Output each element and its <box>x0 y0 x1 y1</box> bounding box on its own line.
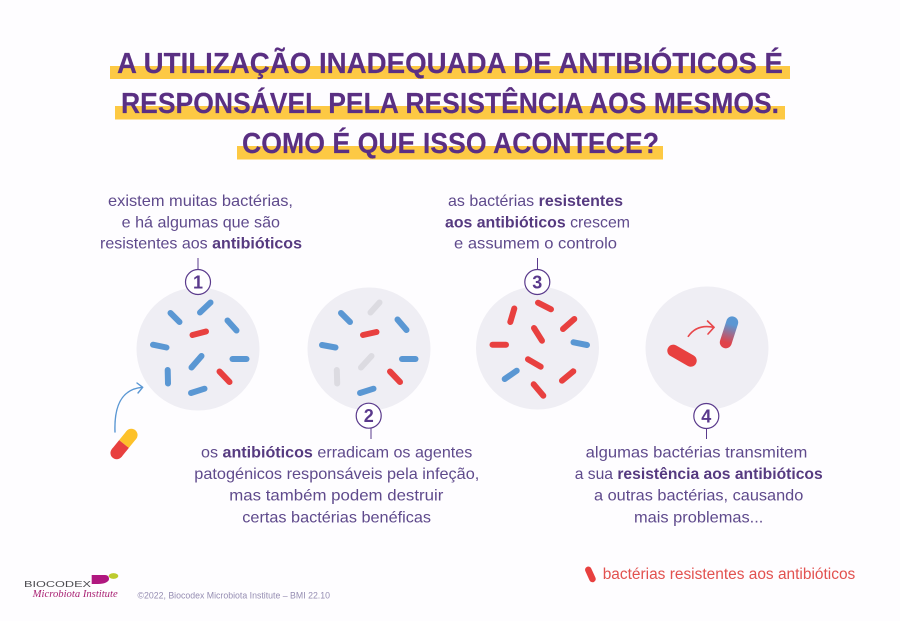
text block: step 2: os antibióticos erradicam os agentes <box>201 444 472 462</box>
text block: step 4: mais problemas... <box>634 509 763 526</box>
title <box>110 48 790 160</box>
text block: step 2: mas também podem destruir <box>229 488 444 505</box>
number badge 2: 2 <box>364 406 374 426</box>
text block: step 3: as bactérias resistentes <box>448 193 623 210</box>
bacterium: blue to red gradient <box>726 322 732 342</box>
number badge 3 <box>525 258 550 294</box>
text block: step 4: algumas bactérias transmitem <box>586 444 807 462</box>
title: RESPONSÁVEL PELA RESISTÊNCIA AOS MESMOS. <box>121 88 779 120</box>
text block: step 1 <box>100 193 302 252</box>
panel: step 2 bacteria circle <box>308 288 430 410</box>
legend: resistant bacteria: bactérias resistentes aos antibióticos <box>603 566 856 583</box>
text block: step 3: aos antibióticos crescem <box>445 214 630 232</box>
logo: Biocodex Microbiota Institute: Microbiota Institute <box>32 589 118 600</box>
panel: step 3 bacteria circle <box>476 286 599 410</box>
text block: step 3: e assumem o controlo <box>454 236 617 252</box>
number badge 3: 3 <box>532 272 542 292</box>
text block: step 2 <box>194 444 479 526</box>
number badge 4: 4 <box>701 406 711 426</box>
arrow: gene transfer <box>688 321 714 336</box>
panel: step 1 bacteria circle <box>136 288 260 410</box>
number badge 1 <box>186 258 210 294</box>
icon: antibiotic pill <box>110 429 138 459</box>
text block: step 1: e há algumas que são <box>122 214 280 232</box>
text block: step 1: resistentes aos antibióticos <box>100 236 302 252</box>
text block: step 3 <box>445 193 630 252</box>
text block: step 4: a outras bactérias, causando <box>594 488 803 505</box>
logo: Biocodex Microbiota Institute <box>24 573 118 600</box>
arrow: pill to circle <box>115 383 143 432</box>
copyright: ©2022, Biocodex Microbiota Institute – BMI 22.10 <box>138 590 330 600</box>
text block: step 4: a sua resistência aos antibióticos <box>575 466 823 483</box>
text block: step 2: certas bactérias benéficas <box>242 509 431 526</box>
number badge 1: 1 <box>193 272 203 292</box>
bacterium: large red <box>673 351 691 361</box>
number badge 2 <box>356 403 381 439</box>
text block: step 1: existem muitas bactérias, <box>108 193 293 210</box>
text block: step 2: patogénicos responsáveis pela infeção, <box>194 466 479 483</box>
panel: step 4 bacteria circle <box>646 286 768 410</box>
title: A UTILIZAÇÃO INADEQUADA DE ANTIBIÓTICOS É <box>117 48 783 80</box>
text block: step 4 <box>575 444 823 526</box>
logo: Biocodex Microbiota Institute: BIOCODEX <box>24 579 91 589</box>
title: COMO É QUE ISSO ACONTECE? <box>242 128 659 160</box>
number badge 4 <box>694 404 719 439</box>
